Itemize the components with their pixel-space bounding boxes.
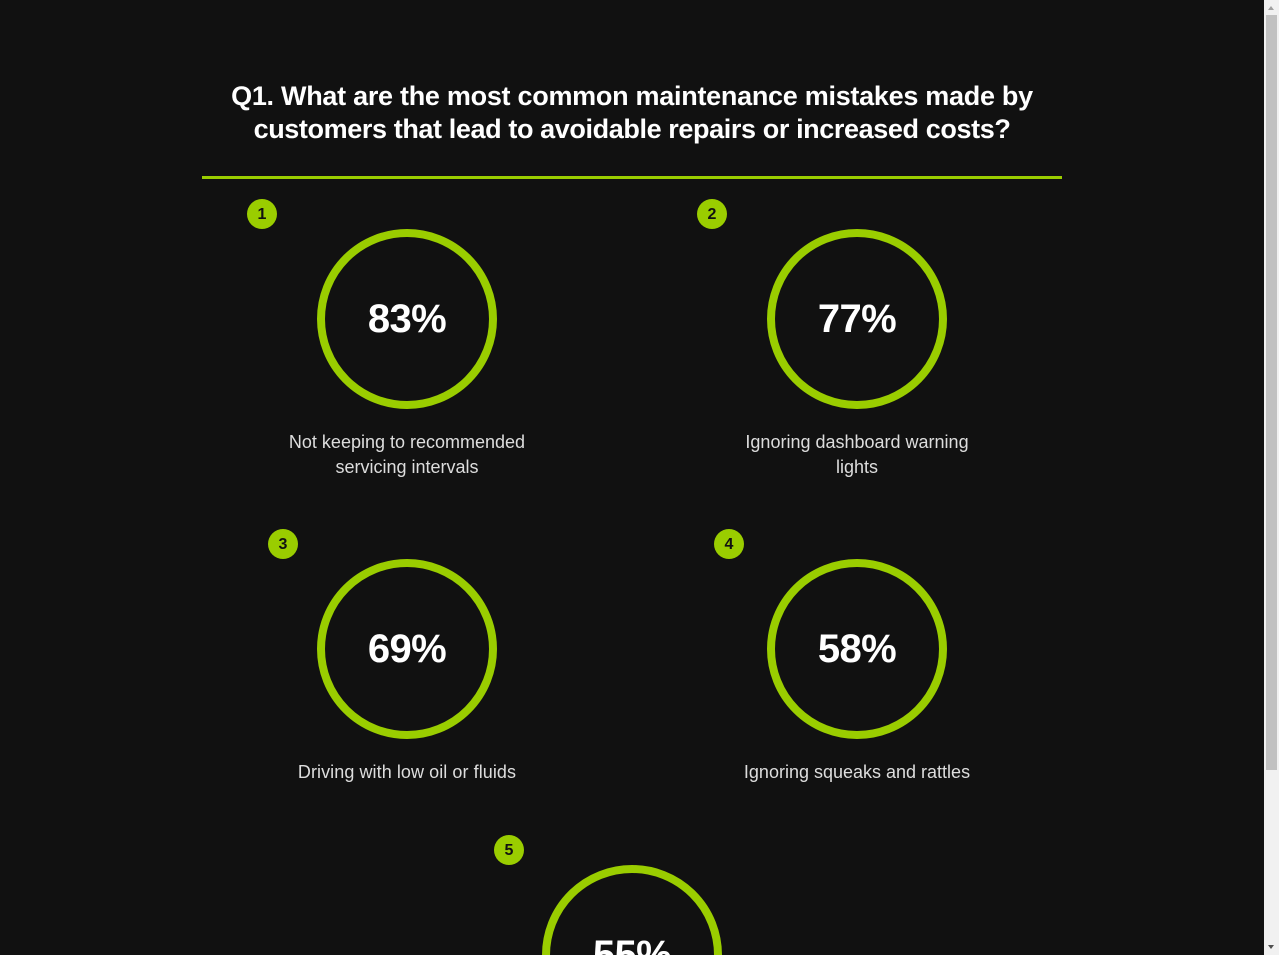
value 83%: 83% [368, 297, 446, 341]
ring 1 [317, 229, 497, 409]
value 69%: 69% [368, 627, 446, 671]
badge 4 [714, 529, 744, 559]
label 1: servicing intervals [335, 457, 479, 477]
value 58%: 58% [818, 627, 896, 671]
label 1: Not keeping to recommended [289, 432, 525, 452]
badge 1: 1 [258, 206, 266, 223]
badge 2: 2 [708, 206, 716, 223]
panel: item 2 [697, 199, 969, 477]
value 77%: 77% [818, 297, 896, 341]
label 2 [745, 432, 969, 477]
scroll down arrow [1268, 945, 1274, 949]
badge 3: 3 [279, 536, 287, 553]
badge 4: 4 [725, 536, 733, 553]
badge 5 [494, 835, 524, 865]
ring 2 [767, 229, 947, 409]
scrollbar [1264, 0, 1279, 955]
scrollbar thumb [1266, 15, 1277, 770]
panel: item 1 [247, 199, 525, 477]
label 3: Driving with low oil or fluids [298, 762, 516, 782]
label 2: Ignoring dashboard warning [745, 432, 969, 452]
label 1 [289, 432, 525, 477]
ring 3 [317, 559, 497, 739]
badge 5: 5 [505, 842, 513, 859]
panel: item 4 [714, 529, 970, 782]
title [231, 81, 1033, 144]
panel: item 3 [268, 529, 516, 782]
badge 3 [268, 529, 298, 559]
badge 1 [247, 199, 277, 229]
ring 4 [767, 559, 947, 739]
title: customers that lead to avoidable repairs or increased costs? [254, 114, 1010, 144]
label 4: Ignoring squeaks and rattles [744, 762, 970, 782]
scroll up arrow [1268, 6, 1274, 10]
title: Q1. What are the most common maintenance mistakes made by [231, 81, 1033, 111]
panel: item 5 [494, 835, 722, 955]
badge 2 [697, 199, 727, 229]
label 2: lights [836, 457, 878, 477]
ring 5 [542, 865, 722, 955]
